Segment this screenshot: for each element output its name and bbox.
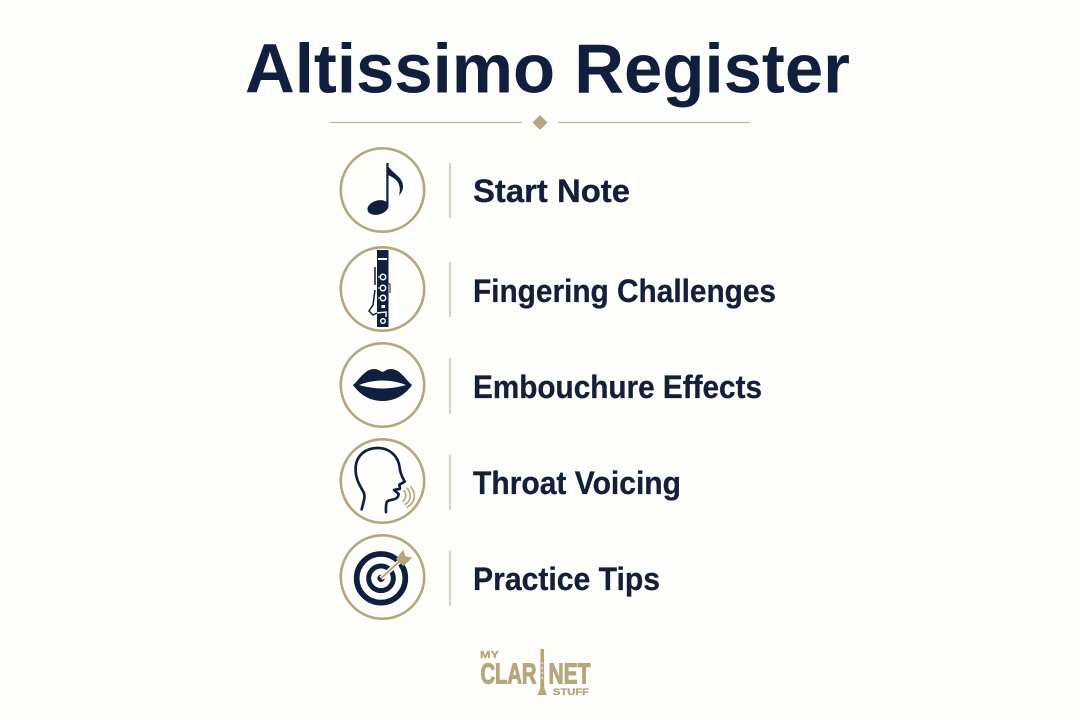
icon: clarinet (341, 247, 424, 331)
list row: Embouchure Effects (341, 343, 762, 427)
logo: My Clarinet Stuff (480, 649, 591, 698)
label: Throat Voicing: Throat Voicing (473, 465, 681, 501)
icon: music note (341, 148, 424, 232)
list row: Fingering Challenges (341, 247, 776, 331)
logo: My Clarinet Stuff: STUFF (553, 687, 589, 698)
icon: target with arrow (341, 535, 424, 619)
list row: Start Note (341, 148, 630, 232)
label: Embouchure Effects: Embouchure Effects (473, 369, 762, 405)
logo: My Clarinet Stuff: CLAR (480, 658, 537, 690)
title divider with diamond (330, 115, 750, 130)
logo: My Clarinet Stuff: MY (480, 649, 499, 661)
icon: clarinet in logo (538, 649, 547, 695)
list row: Practice Tips (341, 535, 660, 619)
icon: lips (341, 343, 424, 427)
label: Practice Tips: Practice Tips (473, 561, 660, 597)
icon: head profile with sound waves (341, 439, 424, 523)
list row: Throat Voicing (341, 439, 681, 523)
title: Altissimo Register (245, 30, 850, 108)
label: Start Note: Start Note (473, 173, 630, 209)
label: Fingering Challenges: Fingering Challenges (473, 273, 776, 309)
logo: My Clarinet Stuff: NET (548, 658, 591, 690)
